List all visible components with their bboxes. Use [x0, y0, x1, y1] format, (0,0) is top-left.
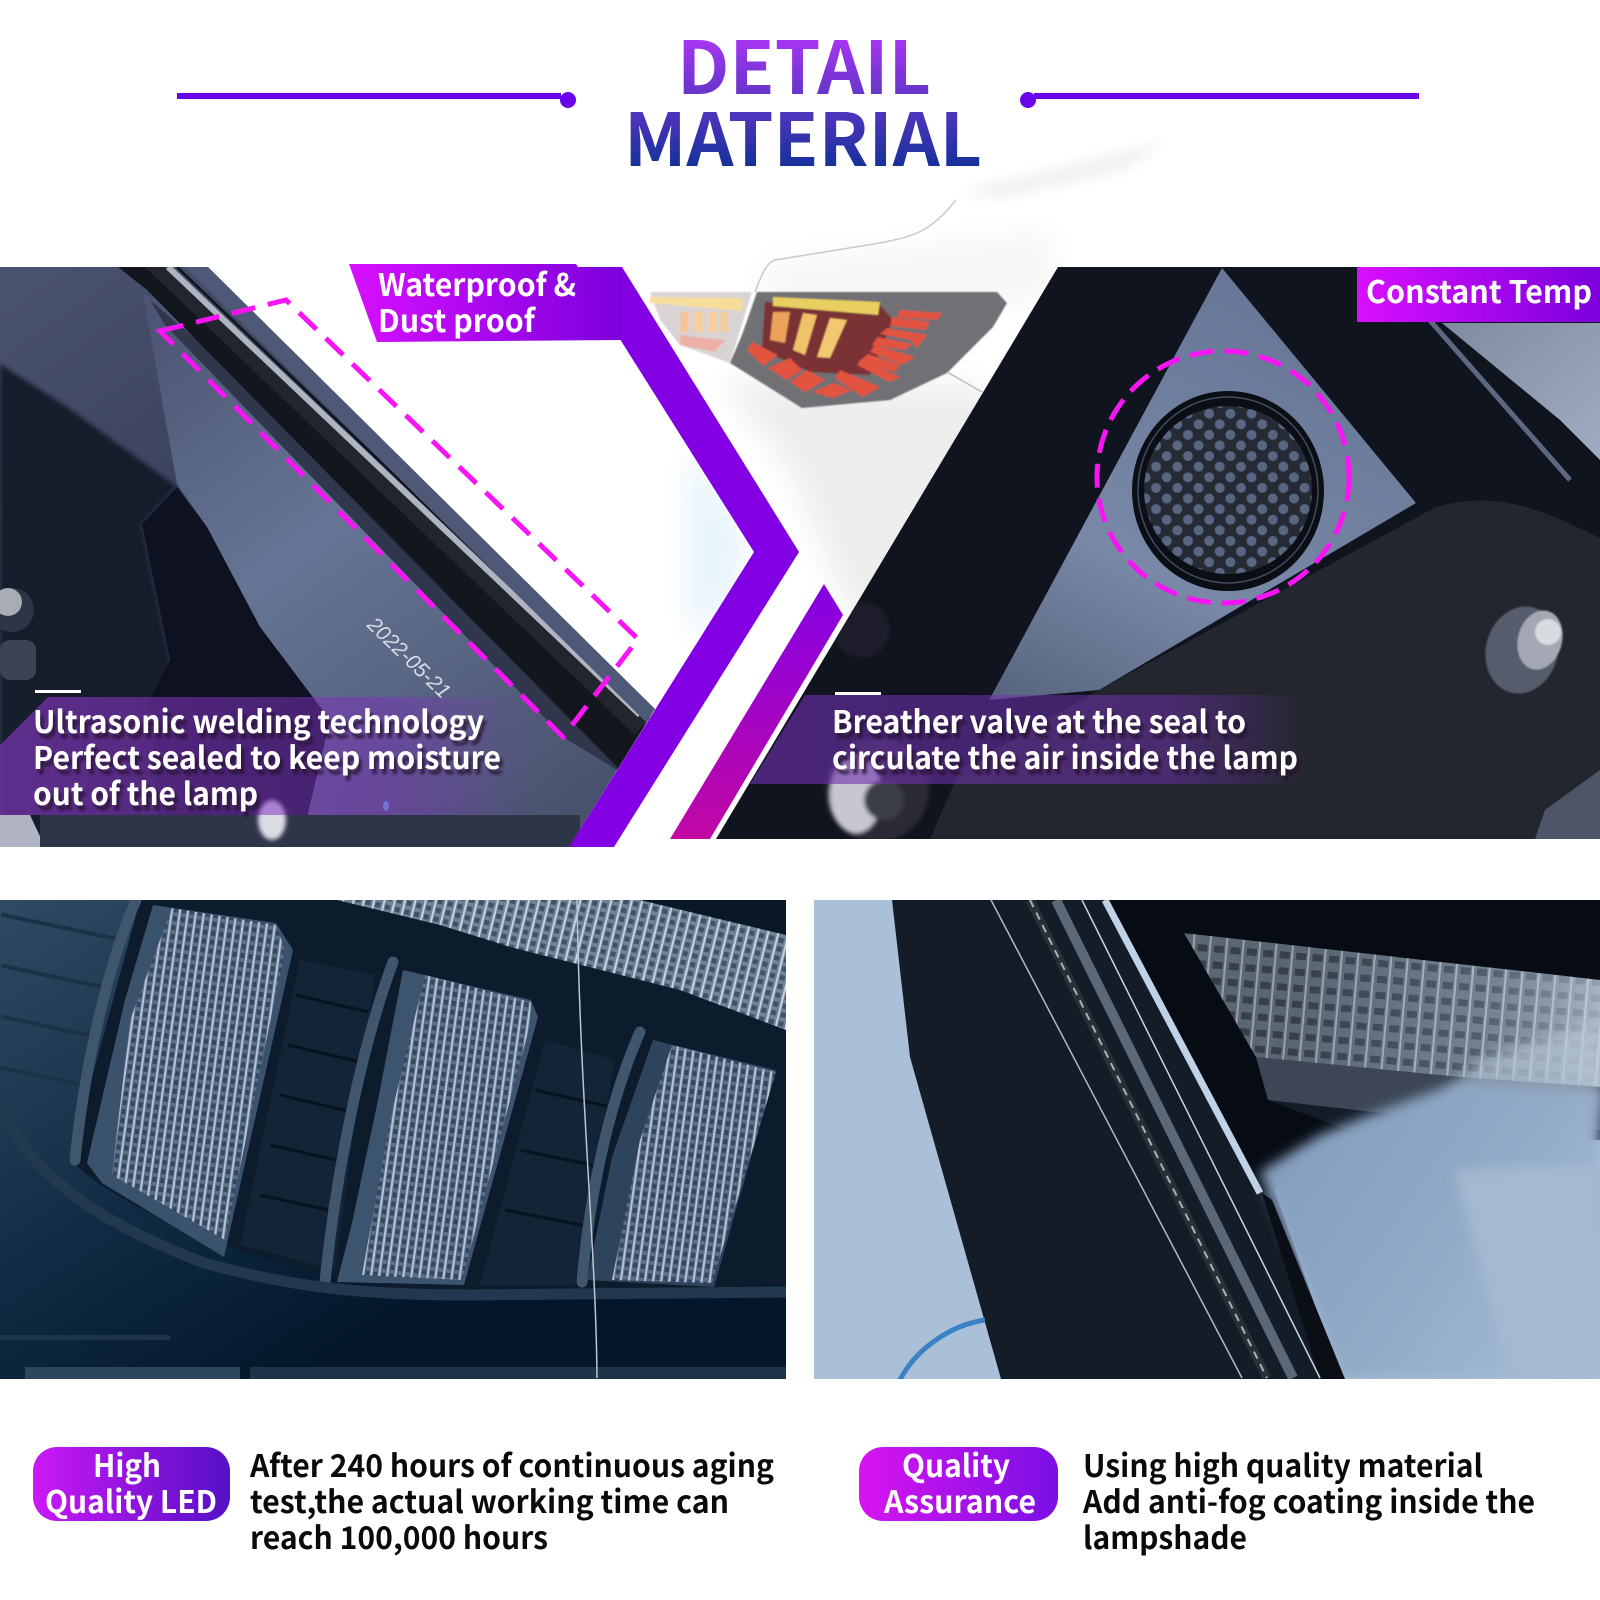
- amber verticals: [770, 312, 790, 343]
- upper right reflective panel: [1442, 323, 1600, 460]
- lower left grommet: [825, 738, 929, 842]
- caption text: Breather valve at the seal to: [832, 697, 1246, 742]
- feature text: material: [1082, 1441, 1535, 1558]
- pill badge: [33, 1447, 230, 1521]
- feature text: aging test: test,the actual working time can: [250, 1477, 729, 1522]
- yellow bar: [773, 297, 880, 315]
- panel: anti-fog lens photo: [814, 900, 1600, 1380]
- mid-left dark seal: [834, 602, 890, 658]
- title line 1: DETAIL: [677, 10, 931, 116]
- feature text: material: Using high quality material: [1083, 1441, 1483, 1486]
- foam pad: [930, 501, 1600, 839]
- hood highlight: [960, 140, 1170, 198]
- label text: Constant Temp: [1366, 267, 1592, 312]
- trunk haze: [760, 232, 1056, 300]
- inner fog block: [1455, 1165, 1600, 1379]
- waterproof dashed outline: [160, 300, 638, 737]
- caption text: Ultrasonic welding technology: [33, 697, 484, 742]
- caption: ultrasonic welding: [0, 690, 540, 815]
- black frame: [892, 900, 1600, 1379]
- main plate: [143, 294, 640, 847]
- vertical ribs: [75, 900, 640, 1282]
- date stamp: 2022-05-21: [362, 612, 455, 703]
- lens 1: [87, 905, 293, 1257]
- background car illustration: [650, 140, 1170, 640]
- pill text: High: [93, 1441, 161, 1486]
- taillight: [650, 292, 1007, 408]
- feature text: material: Add anti-fog coating inside the: [1082, 1477, 1535, 1522]
- car trunk line: [755, 200, 956, 292]
- horizontal ribs left: [1, 913, 119, 1088]
- caption rule: [35, 690, 81, 693]
- light glow: [762, 302, 893, 375]
- left title rule: [177, 92, 576, 108]
- caption text: circulate the air inside the lamp: [832, 733, 1298, 778]
- purple chevron band: [569, 267, 799, 847]
- feature text: aging test: After 240 hours of continuous aging: [249, 1441, 774, 1486]
- photo base: [700, 267, 1600, 847]
- feature: high quality LED: Quality LED: [45, 1477, 217, 1522]
- outer rim: [185, 267, 655, 722]
- seal silver line: [168, 267, 640, 715]
- caption band: [750, 695, 1310, 784]
- top lens strip: [337, 900, 786, 1030]
- caption text: out of the lamp: [33, 769, 258, 814]
- panel: breather valve photo: [700, 267, 1600, 847]
- dark inner housing: [0, 364, 178, 847]
- dark bracket: [142, 487, 330, 847]
- panel: LED lens photo: [0, 900, 786, 1379]
- feature: high quality LED: [33, 1441, 230, 1522]
- purple stripe: [670, 584, 843, 839]
- label: constant temp: [1357, 267, 1600, 322]
- lens 2: [337, 970, 538, 1285]
- feature text: material: lampshade: [1083, 1513, 1247, 1558]
- seal lines: [991, 900, 1320, 1378]
- label: waterproof and dust proof: [349, 260, 622, 342]
- label text: Waterproof &: [378, 260, 576, 305]
- caption: breather valve: [750, 692, 1310, 784]
- photo base: [0, 267, 700, 847]
- triangular plate: [989, 268, 1416, 700]
- valve dashed circle: [1097, 351, 1349, 603]
- caption text: Perfect sealed to keep moisture: [33, 733, 501, 778]
- feature text: aging test: [249, 1441, 774, 1558]
- lens 3: [587, 1040, 776, 1287]
- body haze: [720, 380, 1010, 640]
- caption rule: [835, 692, 881, 695]
- bolt: [0, 588, 36, 680]
- bottom trim: [0, 1335, 786, 1379]
- pill text: Quality: [902, 1441, 1010, 1486]
- red chevrons: [747, 310, 942, 398]
- inner rib lines: [260, 995, 606, 1226]
- lens lower chevron edge: [1256, 1057, 1600, 1130]
- lens grid strip: [1184, 933, 1600, 1087]
- title: [624, 10, 982, 188]
- photo base: [814, 900, 1600, 1379]
- lens fog wash: [1440, 1020, 1600, 1110]
- lower right bracket: [1535, 770, 1600, 839]
- lower floor: [0, 815, 40, 847]
- bolt: [1484, 606, 1564, 694]
- pill badge: [859, 1447, 1058, 1521]
- feature text: aging test: reach 100,000 hours: [250, 1513, 548, 1558]
- frame edge over fog: [1262, 1193, 1345, 1379]
- right taillight housing: [730, 292, 1007, 408]
- inner rib panels: [240, 960, 615, 1285]
- seal dark channel: [118, 267, 650, 775]
- fog lens: [1260, 1082, 1600, 1379]
- feature: quality assurance: [859, 1441, 1058, 1522]
- caption text: [832, 697, 1298, 778]
- left taillight segment: [650, 292, 752, 363]
- caption text: [33, 697, 501, 814]
- title line 2: MATERIAL: [624, 82, 982, 188]
- valve mesh: [1144, 406, 1312, 574]
- photo base: [0, 900, 786, 1379]
- panel: waterproof photo: [0, 267, 700, 847]
- fender crease: [947, 372, 982, 392]
- valve: [1132, 391, 1324, 591]
- lower arc: [22, 1145, 786, 1300]
- valve ring: [1132, 391, 1324, 591]
- plate shadow band: [150, 300, 650, 775]
- blue wire: [900, 1320, 985, 1380]
- label text line 2: Dust proof: [378, 296, 536, 341]
- window glow: [690, 440, 740, 640]
- feature: quality assurance: Assurance: [883, 1477, 1036, 1522]
- right title rule: [1020, 92, 1419, 108]
- caption band: [0, 697, 540, 815]
- top black zone: [1106, 900, 1600, 1193]
- fine wire: [577, 900, 597, 1378]
- dark housing: [76, 900, 716, 1269]
